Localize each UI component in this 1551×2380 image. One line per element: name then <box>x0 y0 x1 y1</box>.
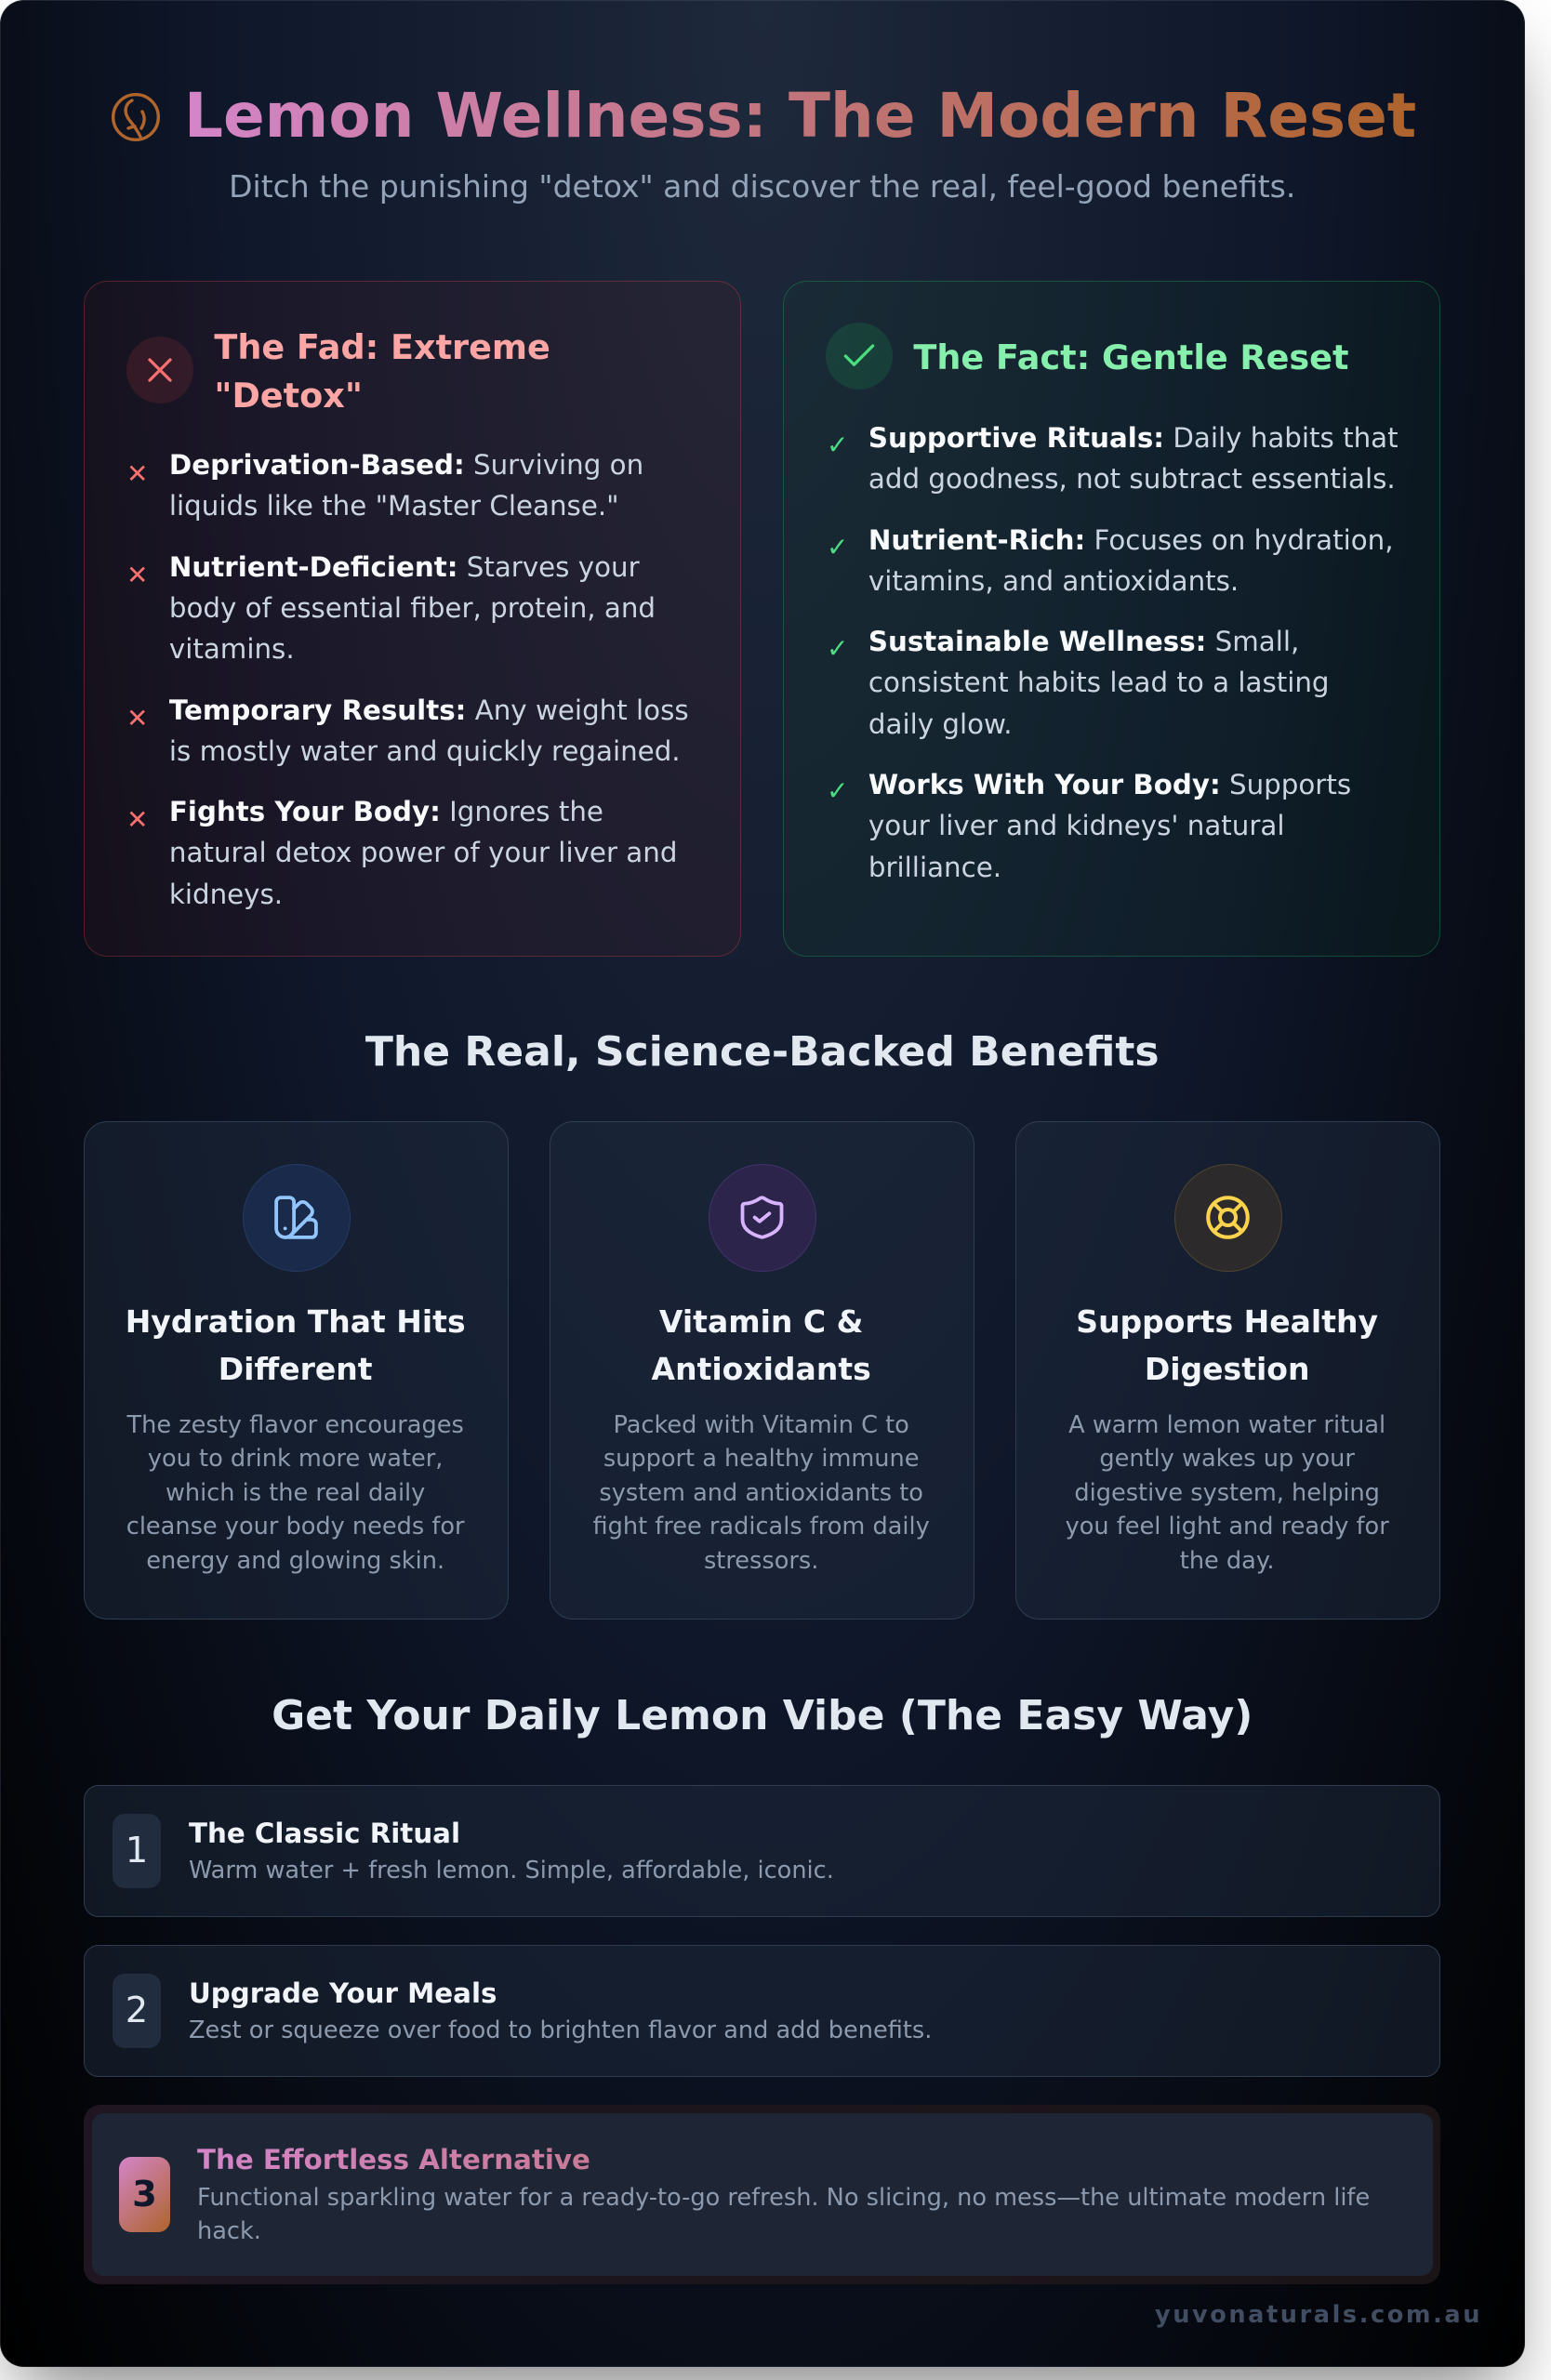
icon: life buoy <box>1174 1164 1282 1272</box>
list item: works with your body: your liver and kidneys' natural <box>868 810 1284 841</box>
card description: cleanse your body needs for <box>126 1513 465 1540</box>
marker: ✕ <box>126 560 148 590</box>
benefit card: hydration <box>84 1121 508 1620</box>
list item: nutrient-rich: Nutrient-Rich: Focuses on hydration, <box>868 524 1394 556</box>
step 2 number <box>113 1974 161 2048</box>
list item: nutrient-deficient: body of essential fiber, protein, and <box>169 592 656 624</box>
icon: shield check <box>709 1164 816 1272</box>
icon: fact check <box>826 323 893 390</box>
watermark: yuvonaturals.com.au <box>1155 2300 1482 2328</box>
title: Lemon Wellness: The Modern Reset <box>184 80 1416 152</box>
card description <box>126 1411 465 1575</box>
marker: ✕ <box>126 703 148 734</box>
card description: the day. <box>1180 1547 1274 1575</box>
step 3 ring <box>84 2105 1440 2284</box>
list item: deprivation: Deprivation-Based: Surviving on <box>169 449 643 481</box>
list item: temporary results <box>169 694 689 767</box>
panel: the fact <box>783 281 1440 957</box>
card description <box>1066 1411 1389 1575</box>
step 1 number: 1 <box>126 1830 148 1871</box>
benefit card: vitamin c <box>550 1121 974 1620</box>
marker: ✕ <box>126 458 148 489</box>
card description: fight free radicals from daily <box>593 1513 930 1540</box>
marker: ✓ <box>827 775 848 806</box>
step 2 number: 2 <box>126 1990 148 2031</box>
card title <box>126 1303 466 1387</box>
step 1 description: Warm water + fresh lemon. Simple, affordable, iconic. <box>189 1856 834 1884</box>
heading: the fact: The Fact: Gentle Reset <box>913 337 1348 377</box>
marker: ✓ <box>827 430 848 460</box>
step 3 row <box>91 2113 1433 2276</box>
card description: A warm lemon water ritual <box>1068 1411 1385 1439</box>
card description: gently wakes up your <box>1099 1445 1355 1473</box>
card title: Vitamin C & <box>659 1303 863 1339</box>
list item: works with your body <box>868 769 1351 883</box>
card title: Hydration That Hits <box>126 1303 466 1339</box>
list item: deprivation: liquids like the "Master Cleanse." <box>169 490 619 522</box>
card title <box>651 1303 871 1387</box>
list item: supportive rituals: add goodness, not subtract essentials. <box>868 463 1396 495</box>
heading: the fad: The Fad: Extreme <box>214 327 550 367</box>
step 2 title: Upgrade Your Meals <box>189 1977 497 2008</box>
list item: works with your body: brilliance. <box>868 852 1001 883</box>
step 3 description <box>197 2183 1370 2245</box>
list item: nutrient-rich: vitamins, and antioxidants. <box>868 565 1239 597</box>
marker: ✓ <box>827 633 848 664</box>
heading: benefits: The Real, Science-Backed Benefits <box>365 1028 1160 1076</box>
card description: which is the real daily <box>166 1478 425 1506</box>
card description: energy and glowing skin. <box>146 1547 444 1575</box>
list item: nutrient-deficient: Nutrient-Deficient: Starves your <box>169 551 640 583</box>
heading: daily vibe: Get Your Daily Lemon Vibe (The Easy Way) <box>272 1692 1253 1739</box>
step 3 title: The Effortless Alternative <box>197 2144 590 2175</box>
card description: The zesty flavor encourages <box>126 1411 464 1439</box>
list item: sustainable wellness: daily glow. <box>868 708 1013 740</box>
list item: fights your body: kidneys. <box>169 879 283 910</box>
list item: temporary results: is mostly water and quickly regained. <box>169 735 681 767</box>
list item: sustainable wellness <box>868 626 1330 740</box>
card description: you to drink more water, <box>148 1445 443 1473</box>
card description <box>593 1411 930 1575</box>
step 1 number <box>113 1814 161 1888</box>
panel: the fad <box>84 281 741 957</box>
card description: support a healthy immune <box>603 1445 919 1473</box>
card description: system and antioxidants to <box>599 1478 923 1506</box>
card description: Packed with Vitamin C to <box>613 1411 909 1439</box>
list item: fights your body: Fights Your Body: Ignores the <box>169 796 603 827</box>
list item: nutrient-deficient: vitamins. <box>169 633 295 665</box>
marker: ✕ <box>126 804 148 835</box>
list item: sustainable wellness: Sustainable Wellness: Small, <box>868 626 1299 657</box>
icon: fad x <box>126 337 193 403</box>
list item: works with your body: Works With Your Body: Supports <box>868 769 1351 800</box>
heading: the fad <box>214 327 550 416</box>
step 1 row <box>84 1785 1440 1917</box>
list item: temporary results: Temporary Results: Any weight loss <box>169 694 689 725</box>
header icon: lemon emblem <box>112 93 160 141</box>
step 3 number <box>119 2157 170 2232</box>
step 3 description: hack. <box>197 2217 261 2245</box>
subtitle: Ditch the punishing "detox" and discover the real, feel-good benefits. <box>229 168 1295 205</box>
list item: supportive rituals <box>868 422 1399 495</box>
card description: stressors. <box>704 1547 818 1575</box>
step 2 row <box>84 1945 1440 2077</box>
card title <box>1076 1303 1378 1387</box>
card title: Digestion <box>1145 1351 1309 1387</box>
list item: deprivation <box>169 449 643 522</box>
step 1 title: The Classic Ritual <box>189 1817 460 1848</box>
list item: sustainable wellness: consistent habits lead to a lasting <box>868 667 1330 698</box>
card title: Antioxidants <box>652 1351 871 1387</box>
heading: the fad: "Detox" <box>214 376 363 416</box>
list item: fights your body: natural detox power of your liver and <box>169 837 677 868</box>
step 2 description: Zest or squeeze over food to brighten flavor and add benefits. <box>189 2016 932 2043</box>
card title: Different <box>219 1351 373 1387</box>
list item: fights your body <box>169 796 677 910</box>
marker: ✓ <box>827 532 848 562</box>
card description: you feel light and ready for <box>1066 1513 1389 1540</box>
card title: Supports Healthy <box>1076 1303 1378 1339</box>
step 3 title <box>197 2140 1415 2177</box>
step 3 number: 3 <box>132 2174 157 2215</box>
icon: swatch book <box>243 1164 351 1272</box>
benefit card: digestion <box>1015 1121 1439 1620</box>
list item: nutrient-deficient <box>169 551 656 665</box>
step 3 description: Functional sparkling water for a ready-to-go refresh. No slicing, no mess—the ultimate modern life <box>197 2183 1370 2211</box>
list item: supportive rituals: Supportive Rituals: Daily habits that <box>868 422 1399 454</box>
card description: digestive system, helping <box>1074 1478 1380 1506</box>
list item: nutrient-rich <box>868 524 1394 597</box>
